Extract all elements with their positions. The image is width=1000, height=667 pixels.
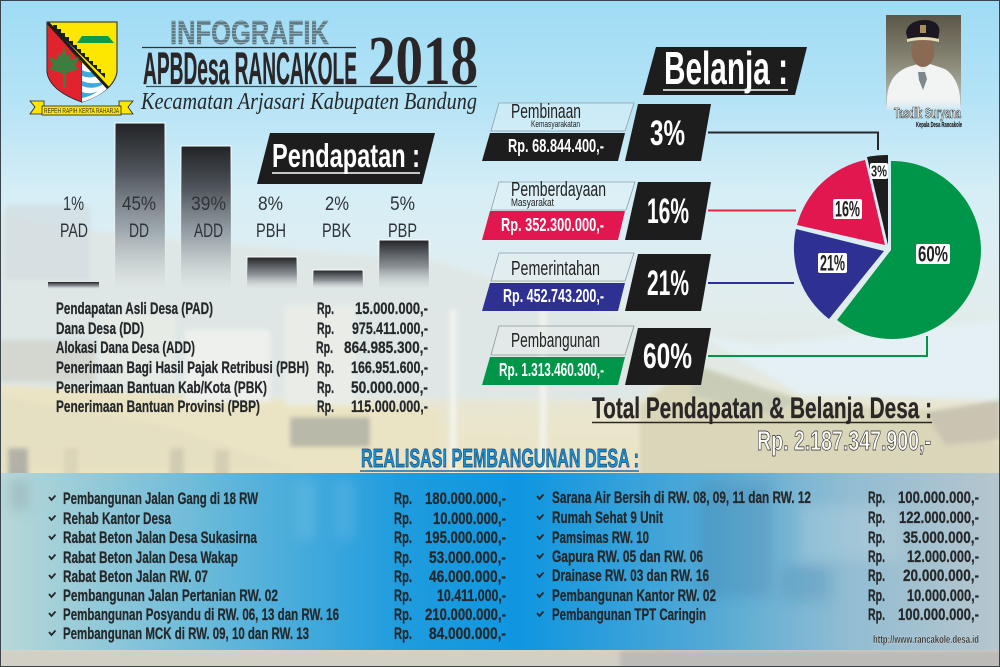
table: Pendapatan details: 15.000.000,- (355, 299, 428, 318)
list: development items, right column: 10.000.000,- (907, 586, 979, 605)
logo: Kabupaten Bandung crest: REPEH RAPIH KERTA RAHARJA (44, 108, 119, 115)
title: INFOGRAFIK: INFOGRAFIK (170, 14, 329, 51)
list: development items, right column: Rp. (868, 528, 885, 547)
table: Pendapatan details: 166.951.600,- (351, 358, 428, 377)
pie chart: Belanja shares: 3% (871, 164, 887, 180)
bar chart: Pendapatan: 1% (63, 193, 84, 215)
list: development items, right column: Rp. (868, 566, 885, 585)
list: development items, right column (537, 488, 979, 624)
spending row: Pemberdayaan Masyarakat: 16% (647, 192, 689, 231)
list: development items, left column: Pembangunan Jalan Pertanian RW. 02 (63, 586, 278, 605)
list: development items, left column: Rp. (394, 528, 412, 547)
spending row: Pembangunan (482, 326, 711, 385)
list: development items, left column: 210.000.000,- (425, 605, 506, 624)
bar chart: Pendapatan: 5% (390, 193, 415, 215)
blue list band (0, 473, 1000, 650)
list: development items, left column (49, 489, 506, 643)
bar chart: Pendapatan: 2% (325, 193, 349, 215)
list: development items, right column: Drainase RW. 03 dan RW. 16 (552, 566, 709, 585)
table: Pendapatan details: Rp. (317, 358, 334, 377)
table: Pendapatan details: Alokasi Dana Desa (ADD) (56, 338, 195, 357)
list: development items, left column: 180.000.000,- (425, 489, 506, 508)
list: development items, left column: 10.000.000,- (433, 509, 506, 528)
list: development items, left column: 195.000.000,- (425, 528, 506, 547)
subtitle: location: Kecamatan Arjasari Kabupaten Bandung (140, 89, 477, 115)
total income and expenditure (592, 392, 932, 456)
list: development items, left column: Pembangunan Jalan Gang di 18 RW (63, 489, 259, 508)
caption: name and title: Kepala Desa Rancakole (916, 122, 962, 129)
list: development items, right column: Pamsimas RW. 10 (552, 528, 649, 547)
list: development items, right column: Pembangunan TPT Caringin (552, 605, 706, 624)
list: development items, left column: Rp. (394, 586, 412, 605)
heading: Realisasi Pembangunan Desa: REALISASI PEMBANGUNAN DESA : (361, 443, 639, 473)
list: development items, left column: Pembangunan Posyandu di RW. 06, 13 dan RW. 16 (63, 605, 339, 624)
title block: APBDesa RANCAKOLE (143, 43, 357, 94)
bar chart: Pendapatan: 45% (122, 193, 156, 215)
list: development items, left column: 84.000.000,- (429, 624, 506, 643)
table: Pendapatan details (56, 299, 428, 416)
bar chart: Pendapatan (48, 123, 429, 289)
table: Pendapatan details: Dana Desa (DD) (56, 319, 144, 338)
list: development items, left column: Rp. (394, 548, 412, 567)
table: Pendapatan details: Rp. (316, 338, 333, 357)
list: development items, right column: Rp. (868, 586, 885, 605)
list: development items, left column: Rp. (394, 567, 412, 586)
table: Pendapatan details: Rp. (317, 397, 334, 416)
list: development items, left column: Rabat Beton Jalan Desa Wakap (63, 548, 238, 567)
list: development items, left column: Rabat Beton Jalan Desa Sukasirna (63, 528, 257, 547)
table: Pendapatan details: Pendapatan Asli Desa (PAD) (56, 299, 213, 318)
table: Pendapatan details: Penerimaan Bantuan Kab/Kota (PBK) (56, 378, 267, 397)
spending row: Pembangunan: Pembangunan (511, 330, 600, 352)
bar chart: Pendapatan: 8% (258, 193, 283, 215)
portrait: village head (886, 15, 962, 129)
list: development items, right column: Gapura RW. 05 dan RW. 06 (552, 547, 703, 566)
heading: Pendapatan (257, 133, 435, 184)
spending row: Pemerintahan: 21% (647, 264, 689, 303)
spending row: Pemberdayaan Masyarakat: Rp. 352.300.000,- (501, 215, 604, 235)
list: development items, left column: Rp. (394, 509, 412, 528)
heading: Belanja (643, 42, 807, 95)
bar chart: Pendapatan: 39% (191, 193, 226, 215)
list: development items, right column: 100.000.000,- (898, 488, 979, 507)
list: development items, right column: Rp. (868, 547, 885, 566)
pie chart: Belanja shares: 60% (918, 242, 948, 266)
bar chart: Pendapatan: ADD (194, 220, 223, 242)
list: development items, right column: Pembangunan Kantor RW. 02 (552, 586, 716, 605)
list: development items, right column: 12.000.000,- (907, 547, 979, 566)
bar chart: Pendapatan: PBP (388, 220, 417, 242)
list: development items, left column: 53.000.000,- (429, 548, 506, 567)
list: development items, right column: Rp. (868, 488, 885, 507)
table: Pendapatan details: 50.000.000,- (351, 378, 428, 397)
bar chart: Pendapatan: PBK (322, 220, 351, 242)
list: development items, right column: Rp. (868, 508, 885, 527)
pie chart: Belanja shares: 21% (820, 250, 845, 276)
list: development items, right column: Sarana Air Bersih di RW. 08, 09, 11 dan RW. 12 (552, 488, 811, 507)
bar chart: Pendapatan: PBH (256, 220, 286, 242)
heading: Pendapatan: Pendapatan : (272, 137, 420, 174)
spending row: Pemberdayaan Masyarakat: Pemberdayaan (511, 179, 606, 201)
list: development items, left column: Pembangunan MCK di RW. 09, 10 dan RW. 13 (63, 624, 309, 643)
logo: Kabupaten Bandung crest (30, 22, 133, 115)
spending row: Pemberdayaan Masyarakat (482, 179, 711, 240)
table: Pendapatan details: Rp. (317, 319, 334, 338)
table: Pendapatan details: 975.411.000,- (352, 319, 428, 338)
list: development items, left column: Rehab Kantor Desa (63, 509, 171, 528)
table: Pendapatan details: Rp. (317, 378, 334, 397)
list: development items, right column: 20.000.000,- (903, 566, 979, 585)
list: development items, left column: 46.000.000,- (429, 567, 506, 586)
title: year 2018: 2018 (368, 23, 478, 100)
list: development items, right column: Rumah Sehat 9 Unit (552, 508, 663, 527)
table: Pendapatan details: Penerimaan Bantuan Provinsi (PBP) (56, 397, 260, 416)
spending row: Pemerintahan: Rp. 452.743.200,- (503, 286, 604, 306)
list: development items, left column: Rp. (394, 624, 412, 643)
heading: Belanja: Belanja : (664, 42, 788, 94)
spending row: Pembinaan Kemasyarakatan (482, 101, 711, 161)
bar chart: Pendapatan: DD (129, 220, 149, 242)
spending row: Pembangunan: Rp. 1.313.460.300,- (499, 360, 604, 380)
spending row: Pembinaan Kemasyarakatan: Kemasyarakatan (531, 119, 580, 130)
pie chart: Belanja shares (794, 155, 981, 339)
table: Pendapatan details: 864.985.300,- (344, 338, 428, 357)
title block (140, 14, 478, 115)
spending row: Pemerintahan: Pemerintahan (511, 258, 600, 280)
list: development items, left column: Rp. (394, 489, 412, 508)
spending row: Pembangunan: 60% (643, 337, 692, 376)
bar chart: Pendapatan: PAD (60, 220, 88, 242)
table: Pendapatan details: Penerimaan Bagi Hasil Pajak Retribusi (PBH) (56, 358, 309, 377)
list: development items, left column: Rabat Beton Jalan RW. 07 (63, 567, 208, 586)
list: development items, right column: Rp. (868, 605, 885, 624)
table: Pendapatan details: 115.000.000,- (351, 397, 428, 416)
list: development items, left column: Rp. (394, 605, 412, 624)
list: development items, left column: 10.411.000,- (437, 586, 506, 605)
connector lines to pie (708, 132, 927, 356)
total income and expenditure: Rp. 2.187.347.900,- (757, 425, 931, 456)
caption: name and title (894, 105, 962, 129)
list: development items, right column: 100.000.000,- (898, 605, 979, 624)
spending row: Pemberdayaan Masyarakat: Masyarakat (511, 197, 554, 209)
table: Pendapatan details: Rp. (317, 299, 334, 318)
spending row: Pembinaan Kemasyarakatan: Pembinaan (511, 101, 581, 123)
spending row: Pembinaan Kemasyarakatan: Rp. 68.844.400,- (508, 136, 604, 156)
spending row: Pemerintahan (482, 253, 711, 311)
list: development items, right column: 35.000.000,- (903, 528, 979, 547)
pie chart: Belanja shares: 16% (835, 196, 860, 222)
spending row: Pembinaan Kemasyarakatan: 3% (650, 114, 685, 153)
